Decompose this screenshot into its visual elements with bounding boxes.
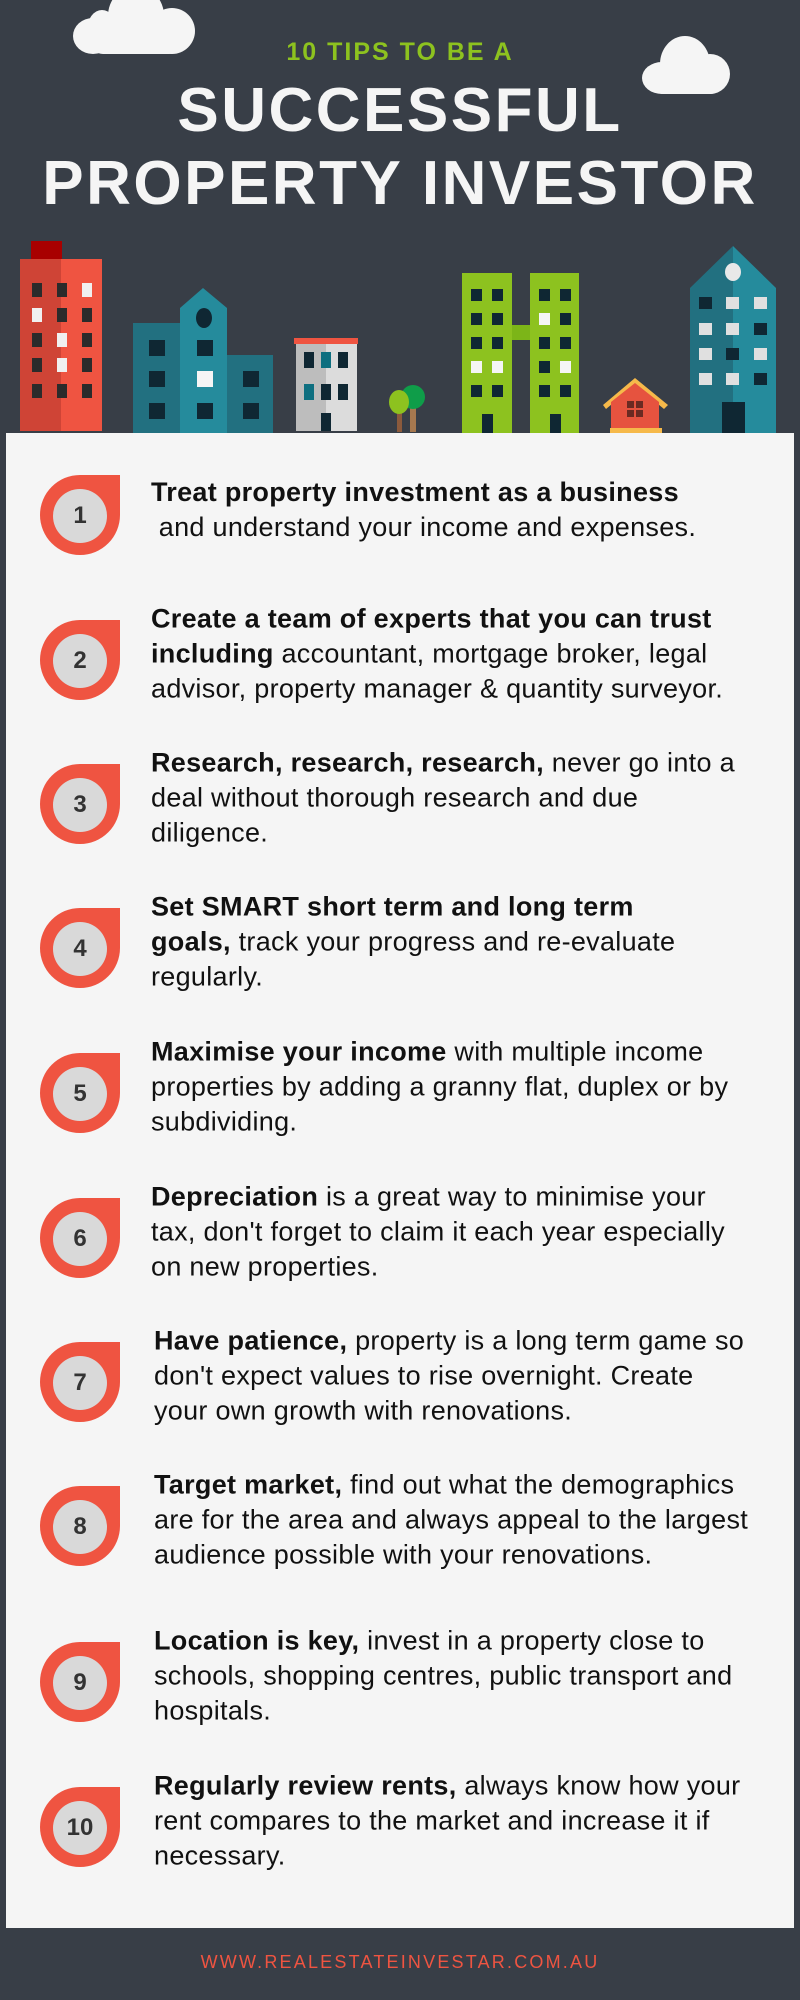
tip 10: rent compares to the market and increase it if [154,1806,710,1836]
tip 5: 5 [73,1080,87,1107]
tip 4 [40,892,675,992]
text: Maximise your income with multiple income [151,1036,704,1066]
tip 2 [40,604,723,704]
text: Target market, find out what the demographics [154,1470,734,1500]
tip 2: advisor, property manager & quantity surveyor. [151,674,723,704]
text: Have patience, property is a long term game so [154,1326,744,1356]
tip 1 [40,475,696,555]
tip 8: are for the area and always appeal to the largest [154,1504,748,1534]
tip 9: 9 [73,1669,87,1696]
teal group [133,288,273,433]
footer url: WWW.REALESTATEINVESTAR.COM.AU [201,1952,599,1972]
tip 10: 10 [67,1814,93,1841]
subtitle: 10 TIPS TO BE A [286,38,514,66]
skyline buildings [20,241,776,433]
panel: tips [6,433,794,1928]
tip 5: properties by adding a granny flat, duplex or by [151,1072,728,1102]
teal tall [690,246,776,433]
tip 5: subdividing. [151,1106,297,1136]
title [42,76,758,218]
tip 1: Treat property investment as a business [151,477,679,507]
text: Depreciation is a great way to minimise your [151,1182,706,1212]
text: Research, research, research, never go into a [151,748,735,778]
tip 7: 7 [73,1369,87,1396]
tip 2: including accountant, mortgage broker, legal [151,638,707,668]
tip 6: 6 [73,1225,87,1252]
tip 5 [40,1036,728,1136]
tip 10: necessary. [154,1840,286,1870]
tip 8: audience possible with your renovations. [154,1540,652,1570]
small house [603,378,668,433]
grey building [294,338,358,431]
tip 3 [40,748,735,848]
tip 7: don't expect values to rise overnight. Create [154,1360,693,1390]
tip 6: on new properties. [151,1252,379,1282]
text: Set SMART short term and long term [151,892,634,922]
tip 8 [40,1470,748,1570]
tip 7: your own growth with renovations. [154,1396,572,1426]
tip 2: 2 [73,647,87,674]
tip 6: tax, don't forget to claim it each year especially [151,1216,725,1246]
cloud right [642,36,730,94]
green towers [462,273,579,433]
tip 6 [40,1182,725,1282]
tip 4: goals, track your progress and re-evaluate [151,926,675,956]
tip 1: and understand your income and expenses. [159,512,696,542]
tip 4: 4 [73,935,87,962]
tip 3: diligence. [151,818,268,848]
title: PROPERTY INVESTOR [42,149,758,218]
tip 3: deal without thorough research and due [151,782,638,812]
text: Location is key, invest in a property close to [154,1626,705,1656]
tip 10 [40,1770,740,1870]
tip 3: 3 [73,791,87,818]
trees [389,385,425,432]
tip 9 [40,1626,732,1726]
cloud left [73,0,195,54]
text: Regularly review rents, always know how your [154,1770,740,1800]
tip 9: hospitals. [154,1696,271,1726]
tip 8: 8 [73,1513,87,1540]
title: SUCCESSFUL [177,76,623,145]
red tower [20,241,102,431]
tip 9: schools, shopping centres, public transport and [154,1660,732,1690]
text: Create a team of experts that you can trust [151,604,712,634]
tip 7 [40,1326,744,1426]
tip 4: regularly. [151,962,263,992]
tip 1: 1 [73,502,87,529]
